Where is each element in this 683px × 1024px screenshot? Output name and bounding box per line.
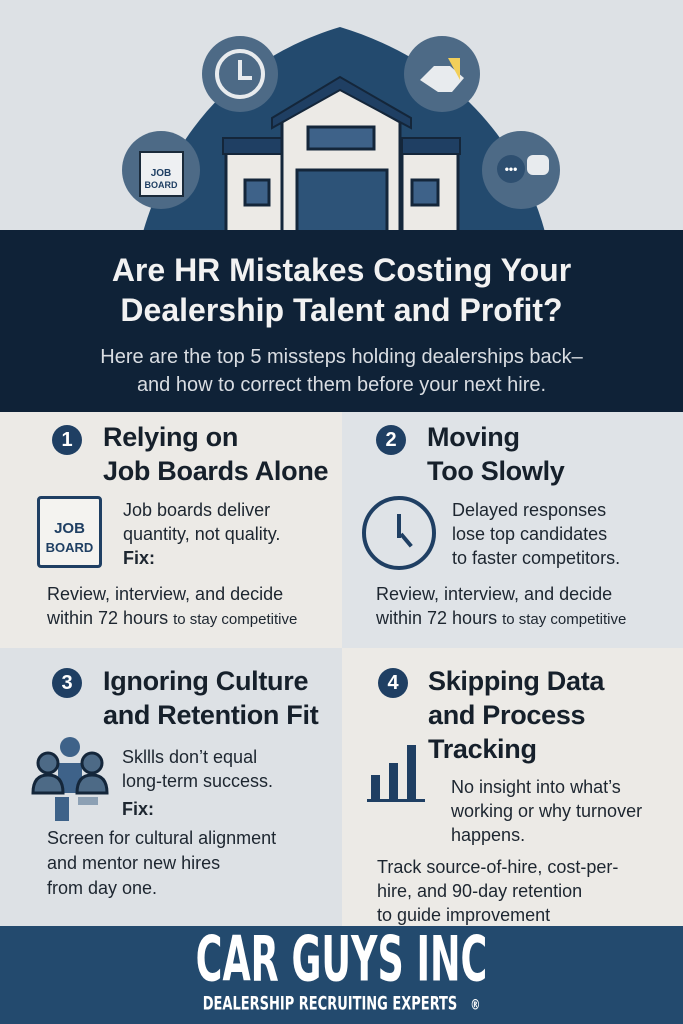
panel: 4: Track source-of-hire, cost-per- (377, 857, 618, 877)
panel: 4: No insight into what’s (451, 777, 621, 797)
building (223, 77, 460, 232)
panel: 4: Tracking (428, 734, 537, 764)
icon: job board circle: BOARD (144, 180, 178, 190)
panel: 2: Too Slowly (427, 456, 564, 486)
icon: bar chart (367, 745, 425, 802)
icon: handshake circle (404, 36, 480, 112)
icon: chat circle: ••• (505, 162, 517, 176)
panel: 2: Moving (427, 422, 520, 452)
panel: 1: quantity, not quality. (123, 524, 280, 544)
panel: 3: Fix: (122, 799, 154, 819)
panel: 4: and Process (428, 700, 585, 730)
icon: clock (362, 496, 436, 570)
panel: 4: Skipping Data (428, 666, 604, 696)
footer logo: DEALERSHIP RECRUITING EXPERTS ® (203, 993, 480, 1015)
icon: job board circle: JOB (151, 168, 171, 179)
panel: 4: working or why turnover (451, 801, 642, 821)
panel: 3: 3 (61, 672, 73, 694)
panel: 3: long-term success. (122, 771, 273, 791)
panel: 3: and Retention Fit (103, 700, 318, 730)
panel: 2: lose top candidates (452, 524, 607, 544)
panel: 4: to guide improvement (377, 905, 550, 925)
panel: 4: hire, and 90-day retention (377, 881, 582, 901)
panel: 1 (0, 412, 342, 648)
icon: clock circle (202, 36, 278, 112)
panel: 1: Job Boards Alone (103, 456, 328, 486)
title: Are HR Mistakes Costing Your (112, 252, 571, 288)
panel: 2: 2 (385, 429, 397, 451)
panel: 4: happens. (451, 825, 525, 845)
panel: 1: Review, interview, and decide (47, 584, 283, 604)
panel: 3 (0, 648, 342, 926)
footer logo: CAR GUYS INC (196, 924, 487, 996)
panel: 3: from day one. (47, 878, 157, 898)
panel: 1: 1 (61, 429, 73, 451)
icon: job board circle (122, 131, 200, 209)
title: Dealership Talent and Profit? (120, 292, 563, 328)
panel: 4 (342, 648, 683, 926)
icon: chat circle (482, 131, 560, 209)
panel: 3: and mentor new hires (47, 853, 220, 873)
subtitle: Here are the top 5 missteps holding dealerships back– (100, 346, 583, 368)
title band (0, 230, 683, 412)
panel: 1: within 72 hours to stay competitive (47, 608, 297, 628)
icon: people (32, 737, 108, 821)
icon: job board (37, 496, 102, 568)
icon: job board: BOARD (46, 540, 93, 555)
hill (143, 27, 545, 232)
panel: 2: within 72 hours to stay competitive (376, 608, 626, 628)
title (112, 252, 571, 328)
panel: 3: Ignoring Culture (103, 666, 308, 696)
panel: 2 (342, 412, 683, 648)
panel: 1: Fix: (123, 548, 155, 568)
panel: 2: Review, interview, and decide (376, 584, 612, 604)
panel: 1: Job boards deliver (123, 500, 270, 520)
panel: 2: to faster competitors. (452, 548, 620, 568)
panel: 3: Screen for cultural alignment (47, 828, 276, 848)
subtitle: and how to correct them before your next hire. (137, 374, 546, 396)
icon: job board: JOB (54, 520, 85, 537)
footer logo (0, 926, 683, 1024)
subtitle (100, 346, 583, 396)
panel: 1: Relying on (103, 422, 238, 452)
panel: 3: Skllls don’t equal (122, 747, 257, 767)
panel: 4: 4 (387, 672, 399, 694)
header illustration (122, 27, 560, 230)
panel: 2: Delayed responses (452, 500, 606, 520)
